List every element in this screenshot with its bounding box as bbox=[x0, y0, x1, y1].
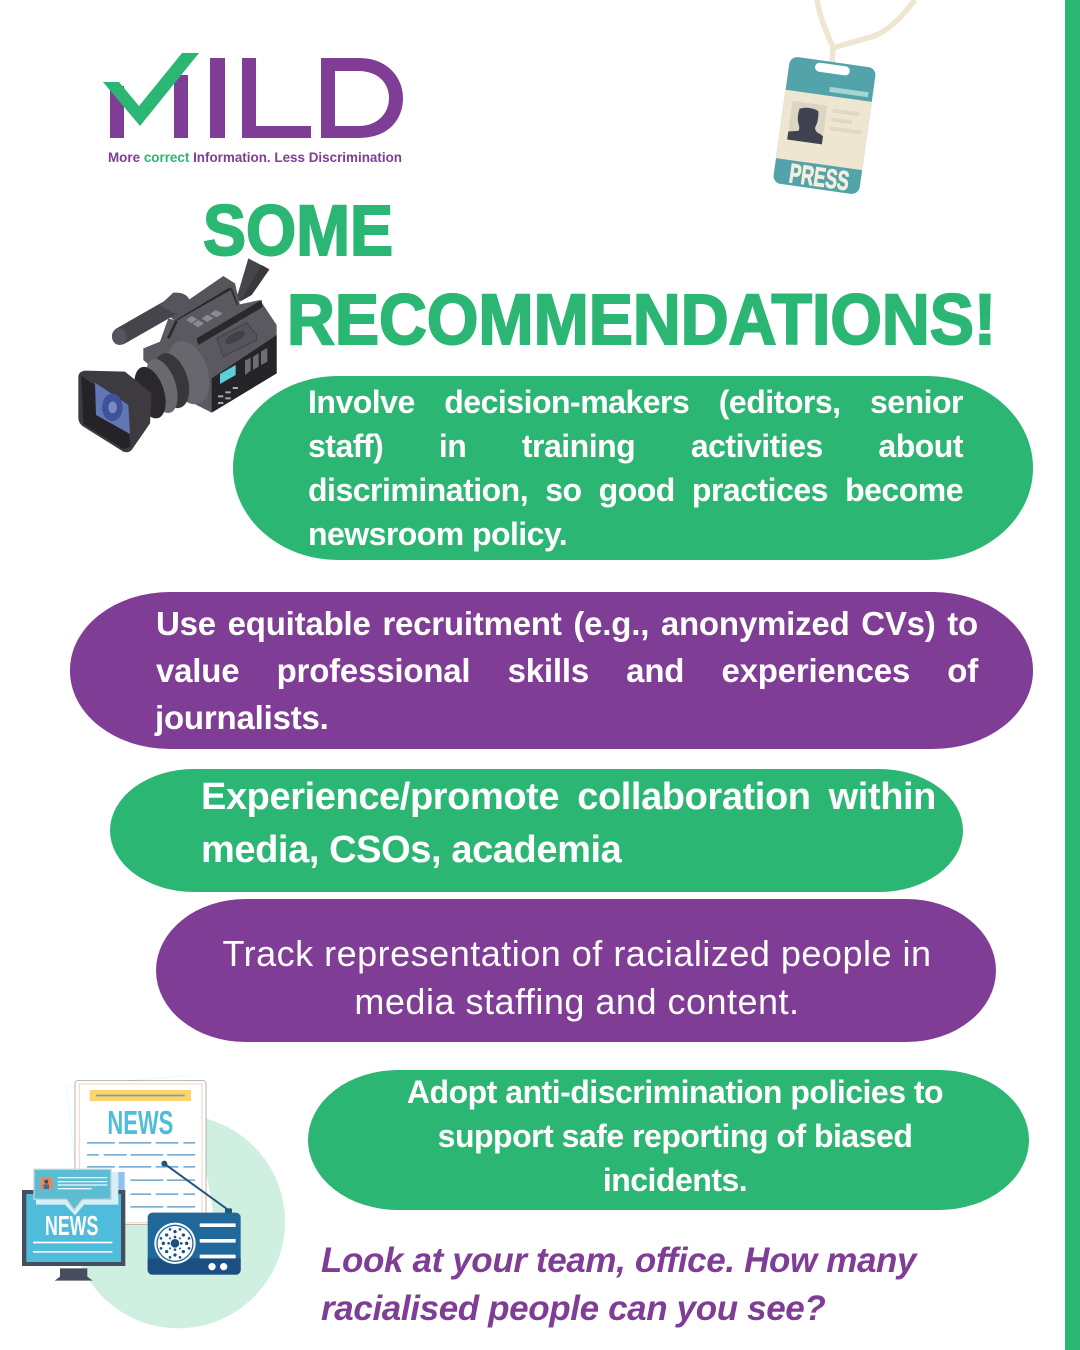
panel: involve decision-makers bbox=[233, 376, 1033, 560]
closing question: racialised people can you see? bbox=[321, 1289, 825, 1328]
panel: anti-discrimination policies bbox=[308, 1070, 1029, 1210]
panel: equitable recruitment: Use equitable recruitment (e.g., anonymized CVs) to bbox=[156, 605, 978, 642]
panel: collaboration bbox=[110, 769, 963, 892]
right edge bar bbox=[1065, 0, 1080, 1350]
panel: anti-discrimination policies: incidents. bbox=[603, 1162, 747, 1198]
panel: track representation: media staffing and content. bbox=[354, 981, 800, 1022]
icon: press badge: PRESS bbox=[787, 158, 851, 196]
panel: equitable recruitment: journalists. bbox=[155, 699, 329, 736]
title: SOME bbox=[203, 192, 393, 271]
closing question: Look at your team, office. How many bbox=[321, 1241, 916, 1280]
panel: track representation: Track representation of racialized people in bbox=[222, 933, 932, 974]
panel: involve decision-makers: discrimination, so good practices become bbox=[308, 472, 963, 508]
panel: equitable recruitment: value professional skills and experiences of bbox=[156, 652, 978, 689]
panel: involve decision-makers: staff) in training activities about bbox=[308, 428, 963, 464]
panel: anti-discrimination policies: Adopt anti-discrimination policies to bbox=[407, 1074, 943, 1110]
title: RECOMMENDATIONS! bbox=[287, 281, 996, 360]
closing question bbox=[321, 1241, 918, 1328]
panel: track representation bbox=[156, 899, 996, 1042]
panel: collaboration: media, CSOs, academia bbox=[201, 829, 621, 871]
panel: involve decision-makers: newsroom policy. bbox=[308, 516, 567, 552]
panel: anti-discrimination policies: support safe reporting of biased bbox=[438, 1118, 912, 1154]
panel: equitable recruitment bbox=[70, 592, 1033, 749]
icon: news illustration: NEWS bbox=[45, 1210, 98, 1241]
logo tagline: More correct Information. Less Discrimination bbox=[108, 150, 402, 165]
panel: collaboration: Experience/promote collaboration within bbox=[201, 776, 936, 818]
icon: logo check mark bbox=[103, 53, 199, 126]
panel: involve decision-makers: Involve decision-makers (editors, senior bbox=[308, 384, 963, 420]
icon: news illustration: NEWS bbox=[107, 1105, 173, 1142]
